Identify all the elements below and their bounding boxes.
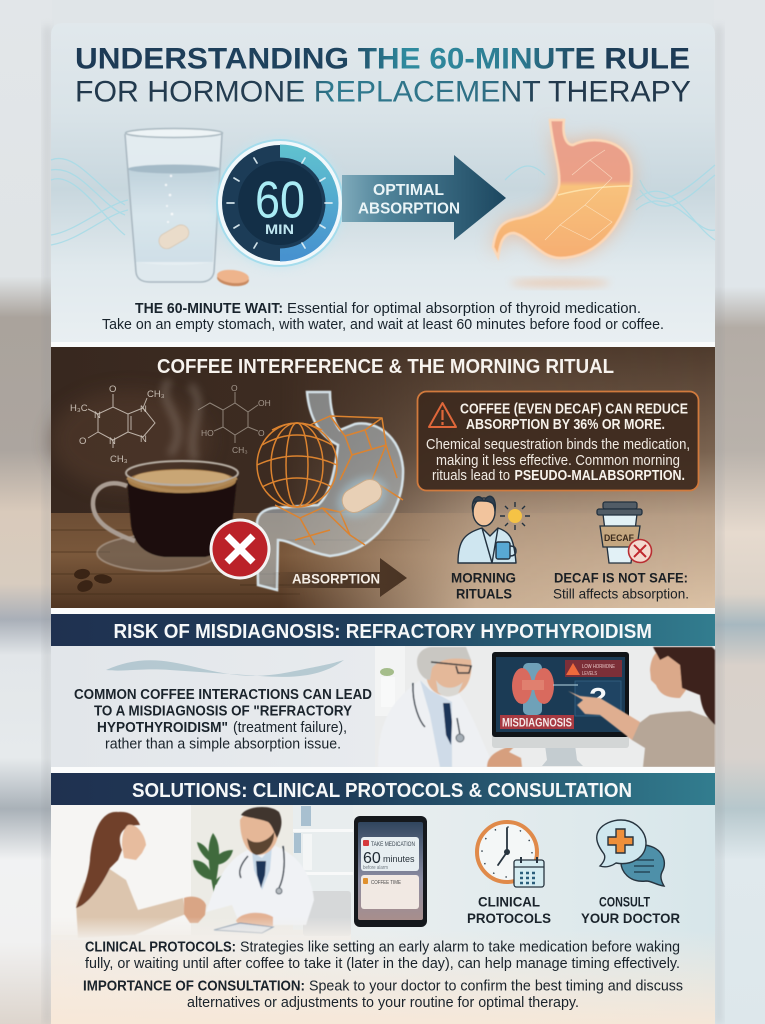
banner: risk of misdiagnosis: RISK OF MISDIAGNOSIS: REFRACTORY HYPOTHYROIDISM [114,620,652,643]
text block: clinical protocols: fully, or waiting until after coffee to take it (later in the day), can help manage timing effectively. [85,955,680,972]
text block: importance of consultation: IMPORTANCE OF CONSULTATION: [83,978,305,994]
panel: misdiagnosis [51,646,715,767]
divider white gap [51,767,715,773]
photo: doctor reviewing monitor with patient [375,646,715,767]
tablet in stomach [330,468,394,526]
molecule: caffeine: N [140,404,147,415]
label: clinical protocols: CLINICAL [478,894,540,910]
text block: misdiagnosis warning: COMMON COFFEE INTERACTIONS CAN LEAD [74,687,372,703]
label: morning rituals [451,570,516,602]
label: clinical protocols [467,894,551,926]
divider white gap [51,342,715,347]
label: decaf is not safe: Still affects absorption. [553,586,689,602]
icon: warning triangle [429,403,456,427]
molecule: caffeine: O [79,436,86,447]
molecule: caffeine: N [109,436,116,447]
molecule: chlorogenic compound: HO [201,428,214,438]
text block: misdiagnosis warning: (treatment failure), [233,719,347,736]
arrow: optimal absorption [342,155,506,240]
divider white gap [51,608,715,614]
low hormone warning label: LOW HORMONE [582,664,615,670]
banner: risk of misdiagnosis [51,614,715,646]
icon: decaf cup with cross: DECAF [604,533,634,544]
doctor [378,647,522,767]
label: decaf is not safe: DECAF IS NOT SAFE: [554,570,688,586]
doctor [184,807,314,933]
misdiagnosis label: MISDIAGNOSIS [502,716,572,730]
text block: the 60-minute wait [102,300,664,333]
panel: solutions [51,805,715,1024]
callout: coffee reduces absorption: rituals lead to [432,467,510,484]
molecule: chlorogenic compound: OH [258,398,271,408]
icon: glowing stomach [493,120,632,287]
callout: coffee reduces absorption: COFFEE (EVEN DECAF) CAN REDUCE [460,402,688,418]
panel: 60-minute wait [51,23,715,343]
molecule: chlorogenic compound: O [231,383,238,393]
callout: coffee reduces absorption: ABSORPTION BY 36% OR MORE. [466,417,665,433]
reminder card: minutes [383,854,415,864]
label: consult your doctor: YOUR DOCTOR [581,910,680,926]
text block: the 60-minute wait: Essential for optimal absorption of thyroid medication. [287,300,641,317]
molecule: caffeine: CH₃ [147,389,165,400]
molecule: caffeine: O [109,384,116,395]
patient woman [76,812,186,938]
panel: coffee interference [50,347,715,608]
title: UNDERSTANDING THE 60-MINUTE RULE [75,42,690,76]
callout: coffee reduces absorption: Chemical sequestration binds the medication, [426,436,690,453]
decorative wave [106,660,344,677]
text block: the 60-minute wait: THE 60-MINUTE WAIT: [135,300,283,317]
text block: misdiagnosis warning: rather than a simple absorption issue. [105,736,341,752]
label: consult your doctor: CONSULT [599,894,650,910]
banner: solutions: SOLUTIONS: CLINICAL PROTOCOLS & CONSULTATION [132,779,632,802]
icon: translucent stomach with binding net [257,392,403,590]
digits: 60 [255,172,305,230]
office background [51,805,353,936]
label: morning rituals: RITUALS [456,586,512,602]
text block: importance of consultation [83,978,683,1011]
decorative data wave backdrop [51,158,715,245]
icon: 60-minute timer: MIN [265,221,294,237]
text block: the 60-minute wait: Take on an empty stomach, with water, and wait at least 60 minutes before food or coffee. [102,316,664,333]
icon: tablet with timer reminder [354,816,427,927]
molecule: chlorogenic compound: CH₃ [232,445,248,455]
icon: red cross-out circle [210,518,270,580]
icon: clock and calendar [477,822,544,887]
label: consult your doctor [581,894,680,926]
icon: morning ritual person with sun and cup [458,496,530,563]
molecule: caffeine [70,384,165,465]
thyroid graphic [512,663,554,715]
reminder card [361,837,419,871]
net [257,416,403,545]
question mark: ? [589,682,607,713]
icon: pill on table [216,268,250,288]
text block: clinical protocols: CLINICAL PROTOCOLS: [85,938,236,956]
coffee card: COFFEE TIME [371,880,401,886]
wooden table [51,513,715,608]
text block: clinical protocols: Strategies like setting an early alarm to take medication before waking [240,938,680,956]
title: FOR HORMONE REPLACEMENT THERAPY [75,76,691,108]
label: clinical protocols: PROTOCOLS [467,910,551,926]
label: morning rituals: MORNING [451,570,516,586]
molecule: caffeine: CH₃ [110,454,128,465]
icon: 60-minute timer [214,137,346,269]
heading: COFFEE INTERFERENCE & THE MORNING RITUAL [157,356,614,378]
icon: consult doctor chat bubbles [597,820,664,886]
molecule: chlorogenic compound [198,383,271,455]
text block: importance of consultation: alternatives or adjustments to your routine for optimal therapy. [187,994,579,1011]
callout: coffee reduces absorption: making it less effective. Common morning [436,452,680,469]
arrow: absorption: ABSORPTION [292,570,380,586]
molecule: caffeine: H₃C [70,403,88,414]
icon: coffee cup on saucer [93,461,238,571]
low hormone warning label [565,660,622,677]
steam [165,380,198,460]
banner: solutions [51,773,715,805]
icon: coffee beans [73,568,112,594]
reminder card: TAKE MEDICATION [371,842,415,848]
photo: doctor and patient handshake [51,805,353,940]
callout: coffee reduces absorption: PSEUDO-MALABSORPTION. [514,468,685,484]
text block: importance of consultation: Speak to your doctor to confirm the best timing and discuss [309,978,683,994]
label: decaf is not safe [553,570,689,602]
molecule: chlorogenic compound: O [258,428,265,438]
text block: clinical protocols [85,938,680,972]
reminder card: 60 [363,850,381,867]
text block: misdiagnosis warning [74,687,372,752]
arrow: absorption [272,558,407,597]
text block: misdiagnosis warning: HYPOTHYROIDISM" [97,720,228,736]
callout: coffee reduces absorption [418,392,698,490]
computer monitor [492,652,629,766]
title [75,42,691,108]
arrow: optimal absorption: ABSORPTION [358,200,460,218]
molecule: caffeine: N [94,410,101,421]
text block: misdiagnosis warning: TO A MISDIAGNOSIS OF "REFRACTORY [94,704,352,720]
patient pointing [568,647,715,767]
icon: glass of water with pill [125,128,222,282]
molecule: caffeine: N [140,434,147,445]
arrow: optimal absorption: OPTIMAL [373,182,444,199]
low hormone warning label: LEVELS [582,671,597,677]
reminder card: before alarm [363,865,388,871]
icon: decaf cup with cross [597,502,652,563]
